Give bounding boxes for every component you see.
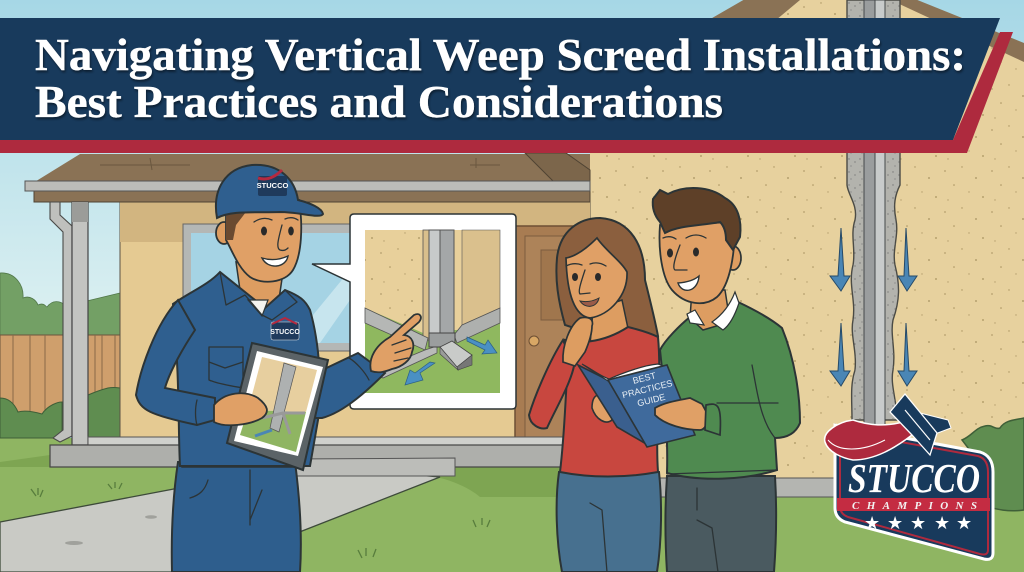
man ear [725, 246, 741, 270]
cap logo [257, 170, 288, 196]
foundation strip right [590, 478, 840, 497]
callout scene: grass [365, 230, 500, 393]
logo wordmark: STUCCO [848, 455, 980, 501]
background trees [0, 273, 120, 340]
vertical weep screed strip [847, 0, 900, 425]
sky background [0, 0, 1024, 320]
woman hair back [556, 218, 658, 345]
man sweater [660, 302, 800, 479]
technician pants [172, 462, 301, 572]
water flow arrows [830, 228, 917, 386]
right bush [962, 418, 1024, 511]
callout arrow left [405, 362, 435, 385]
callout arrow right [467, 337, 497, 354]
banner navy panel [0, 18, 1000, 140]
window [183, 224, 353, 351]
open book: PRACTICES [621, 378, 673, 400]
woman eyes and mouth [566, 263, 606, 306]
technician neck [236, 262, 283, 306]
porch post [72, 202, 88, 445]
logo stars: ★★★★★ [864, 513, 972, 534]
technician eyes and brows [254, 218, 298, 250]
woman jeans [557, 472, 661, 572]
left shrubs [0, 388, 120, 438]
woman sweater [560, 327, 659, 476]
logo subtitle: CHAMPIONS [852, 500, 977, 512]
porch foundation [50, 437, 590, 476]
porch roof [25, 153, 590, 202]
woman face [566, 238, 627, 318]
technician pocket [209, 347, 243, 388]
technician left arm [136, 300, 215, 425]
callout scene: metal screed [365, 230, 500, 378]
downspout [50, 202, 72, 442]
callout bubble [312, 214, 516, 409]
logo red swoosh [825, 420, 912, 460]
header banner [0, 18, 1013, 153]
technician right arm [315, 353, 385, 418]
banner red accent [0, 32, 1013, 153]
man neck and collar [687, 290, 739, 330]
wooden fence [0, 335, 120, 417]
woman arm [529, 340, 574, 428]
sidewalk [0, 465, 440, 572]
technician ear [216, 222, 232, 244]
woman hand [563, 317, 592, 366]
darker lawn band [0, 455, 600, 497]
technician shirt [173, 272, 320, 466]
technician mouth [262, 256, 288, 266]
stucco wall [590, 0, 1024, 480]
open book: GUIDE [636, 392, 666, 408]
callout scene: stucco panels [365, 230, 500, 340]
man hair [653, 188, 740, 250]
tablet [227, 343, 328, 470]
man sleeve cuff [705, 404, 720, 435]
technician [136, 165, 421, 572]
front door [515, 226, 590, 438]
lawn [0, 438, 1024, 572]
title: Best Practices and Considerations [35, 76, 723, 127]
logo badge [835, 425, 993, 559]
porch wall [120, 200, 590, 440]
technician cap [216, 165, 323, 218]
technician belt [182, 451, 297, 467]
title: Navigating Vertical Weep Screed Installations: [35, 29, 966, 80]
technician face [226, 200, 301, 282]
man far hand [592, 395, 612, 422]
cap logo: STUCCO [257, 181, 288, 190]
book title: BEST [632, 370, 657, 386]
chest logo: STUCCO [270, 329, 300, 336]
man near hand [655, 398, 708, 430]
chest logo [270, 318, 300, 340]
man eyes and mouth [663, 235, 706, 290]
gable roof [700, 0, 1024, 153]
man pants [666, 476, 776, 572]
technician hand on tablet [214, 393, 267, 425]
Stucco Champions logo [825, 394, 993, 559]
man [578, 188, 800, 572]
open book [578, 364, 695, 447]
grass tufts [31, 482, 490, 558]
logo ribbon [837, 498, 990, 511]
man face [660, 222, 735, 303]
technician pointing hand [370, 314, 421, 372]
logo trowel [890, 394, 951, 455]
woman neck [590, 300, 630, 345]
woman [529, 218, 661, 572]
title [35, 29, 966, 127]
